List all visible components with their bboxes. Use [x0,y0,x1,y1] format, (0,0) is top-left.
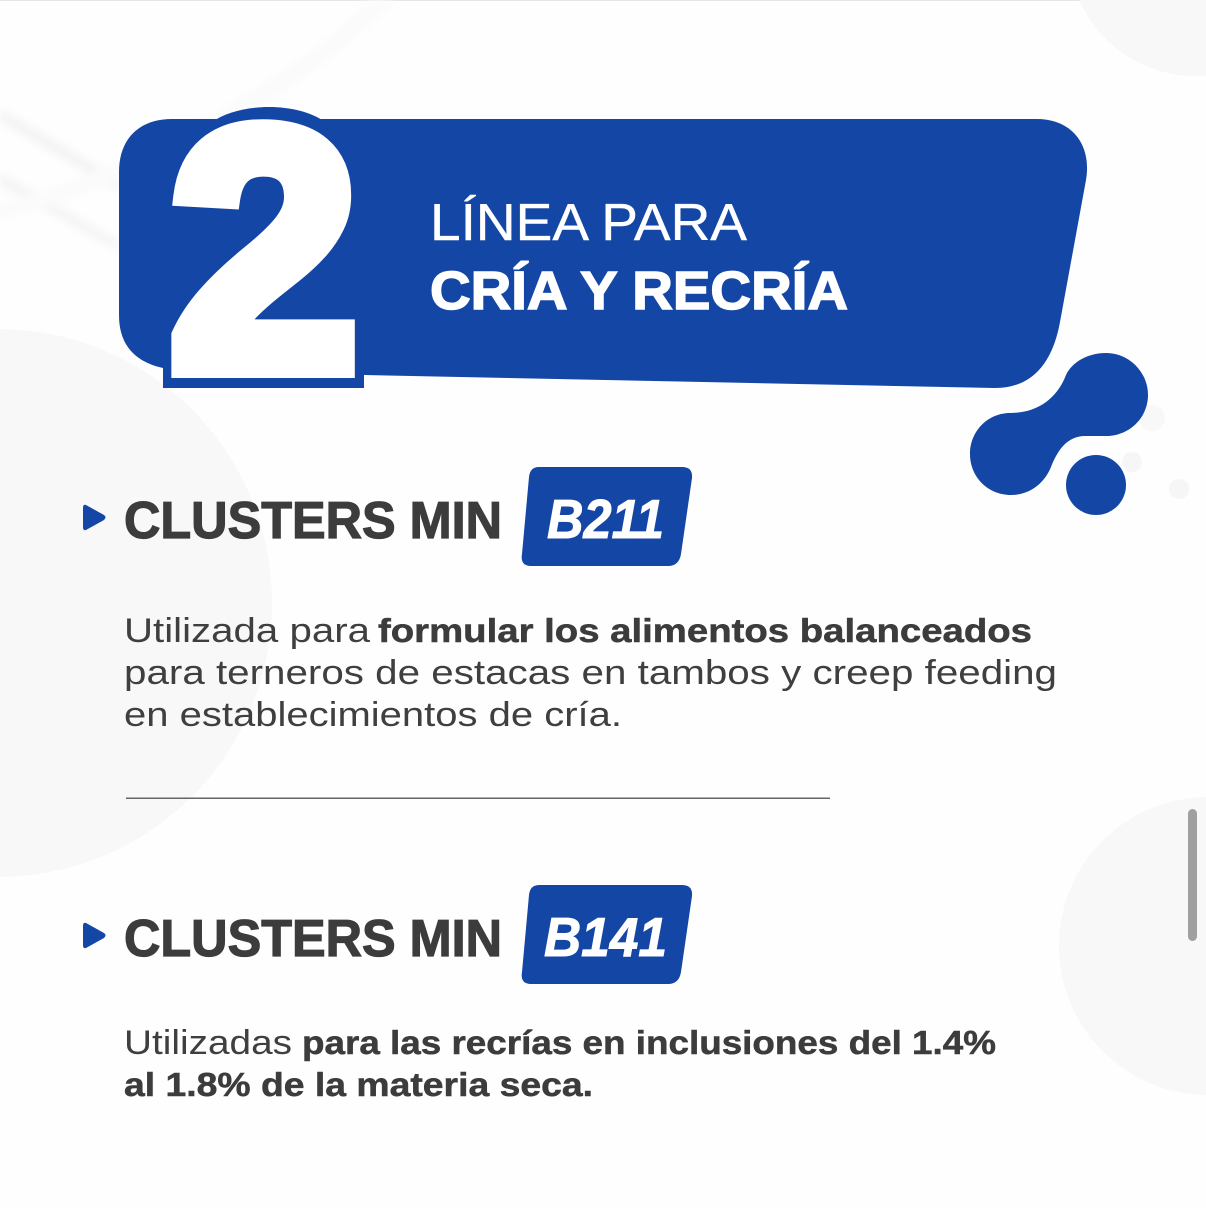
heading: CLUSTERS MIN [124,492,502,550]
title line 2: CRÍA Y RECRÍA [430,261,848,321]
number 2: 2 [170,59,358,441]
title line 1: LÍNEA PARA [430,194,747,252]
description: en establecimientos de cría. [124,696,622,734]
description [124,1024,996,1103]
header banner [119,59,1087,441]
badge: B211 [547,488,664,550]
section: Clusters Min B211 [83,467,1057,734]
icon: arrow bullet [83,505,106,530]
description [124,612,1057,734]
heading: CLUSTERS MIN [124,910,502,968]
description: Utilizadas [124,1024,292,1062]
banner shape [119,119,1087,388]
badge [522,885,692,984]
icon: decorative blue blob [970,353,1148,515]
number outline bump [200,107,340,150]
description: para las recrías en inclusiones del 1.4% [302,1024,996,1061]
description: para terneros de estacas en tambos y creep feeding [124,654,1057,692]
section: Clusters Min B141 [83,885,996,1103]
description: formular los alimentos balanceados [378,612,1032,649]
badge: B141 [544,906,667,968]
icon: arrow bullet [83,923,106,948]
description: Utilizada para [124,612,370,650]
scrollbar [1188,809,1197,941]
badge [522,467,692,566]
description: al 1.8% de la materia seca. [124,1066,593,1103]
